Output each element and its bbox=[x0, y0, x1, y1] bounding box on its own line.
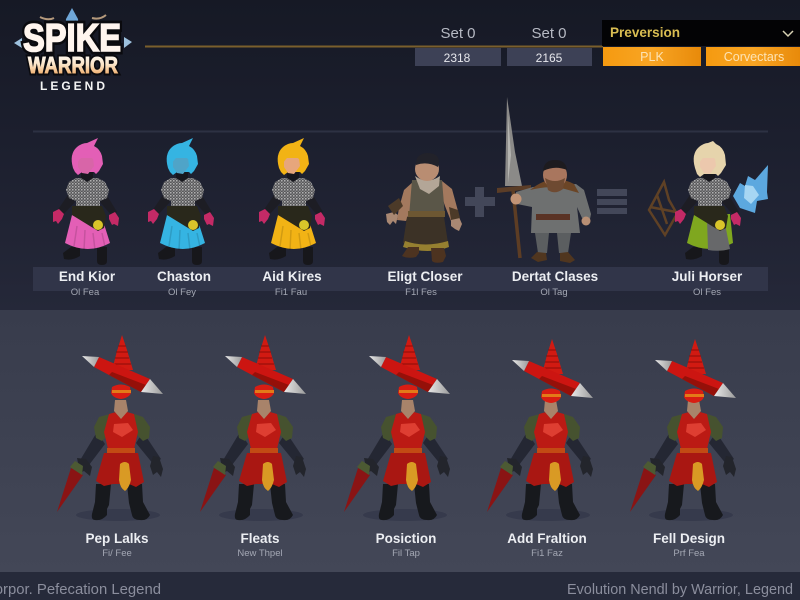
background bbox=[0, 0, 800, 310]
logo: SPIKE bbox=[23, 17, 121, 60]
version dropdown: Preversion bbox=[610, 24, 680, 40]
warrior: Fleats: Fleats bbox=[240, 531, 280, 546]
character: Juli Horser with bow and crystal: Ol Fes bbox=[693, 287, 721, 298]
character: Eligt Closer bbox=[386, 153, 463, 298]
stat column 1: Set 0 bbox=[440, 25, 476, 42]
character: End Kior: End Kior bbox=[59, 269, 116, 284]
warrior: Add Fraltion: Add Fraltion bbox=[507, 531, 587, 546]
footer right text: Evolution Nendl by Warrior, Legend bbox=[567, 581, 793, 598]
character: Eligt Closer: Eligt Closer bbox=[387, 269, 463, 284]
header gold rule bbox=[145, 46, 603, 48]
orange button: Corvectars bbox=[706, 47, 800, 66]
logo bbox=[14, 8, 132, 93]
character: Aid Kires: Aid Kires bbox=[262, 269, 322, 284]
logo: WARRIOR bbox=[28, 52, 118, 78]
stat column 2: Set 0 bbox=[531, 25, 567, 42]
character: Dertat Clases with spear: Dertat Clases bbox=[512, 269, 598, 284]
character: End Kior bbox=[53, 138, 119, 298]
warrior: Pep Lalks bbox=[57, 335, 163, 559]
stat column 1: 2318 bbox=[444, 51, 471, 65]
character: Chaston: Ol Fey bbox=[168, 287, 196, 298]
character: Chaston bbox=[148, 138, 214, 298]
warrior: Fleats: New Thpel bbox=[237, 548, 283, 559]
character: Chaston: Chaston bbox=[157, 269, 211, 284]
stat column 2 bbox=[507, 25, 592, 66]
logo: WARRIOR bbox=[28, 52, 118, 78]
orange button: PLK bbox=[603, 47, 701, 66]
label strip bbox=[33, 267, 768, 291]
character: Eligt Closer: F1l Fes bbox=[405, 287, 437, 298]
character: Juli Horser with bow and crystal bbox=[649, 141, 768, 298]
warrior: Add Fraltion bbox=[487, 339, 593, 559]
warrior: Posiction: Fil Tap bbox=[392, 548, 420, 559]
warrior: Add Fraltion: Fi1 Faz bbox=[531, 548, 563, 559]
warrior: Fleats bbox=[200, 335, 306, 559]
version dropdown bbox=[602, 20, 800, 46]
lower panel background bbox=[0, 310, 800, 572]
warrior: Fell Design: Fell Design bbox=[653, 531, 725, 546]
warrior: Pep Lalks: Pep Lalks bbox=[85, 531, 149, 546]
section divider bbox=[33, 130, 768, 132]
warrior: Fell Design bbox=[630, 339, 736, 559]
character: End Kior: Ol Fea bbox=[71, 287, 100, 298]
warrior: Posiction: Posiction bbox=[376, 531, 436, 546]
logo: SPIKE bbox=[23, 17, 121, 60]
character: Dertat Clases with spear bbox=[497, 97, 598, 298]
character: Juli Horser with bow and crystal: Juli Horser bbox=[672, 269, 743, 284]
footer bar bbox=[0, 572, 800, 600]
plus sign bbox=[465, 187, 495, 217]
stat column 2: 2165 bbox=[536, 51, 563, 65]
logo: LEGEND bbox=[40, 79, 105, 93]
orange button: PLK: PLK bbox=[640, 50, 664, 64]
character: Aid Kires bbox=[259, 138, 325, 298]
equals sign bbox=[597, 189, 627, 214]
orange button: Corvectars: Corvectars bbox=[724, 50, 784, 64]
character: Dertat Clases with spear: Ol Tag bbox=[540, 287, 568, 298]
warrior: Pep Lalks: Fi/ Fee bbox=[102, 548, 132, 559]
warrior: Posiction bbox=[344, 335, 450, 559]
warrior: Fell Design: Prf Fea bbox=[673, 548, 705, 559]
stat column 1 bbox=[415, 25, 501, 66]
character: Aid Kires: Fi1 Fau bbox=[275, 287, 307, 298]
